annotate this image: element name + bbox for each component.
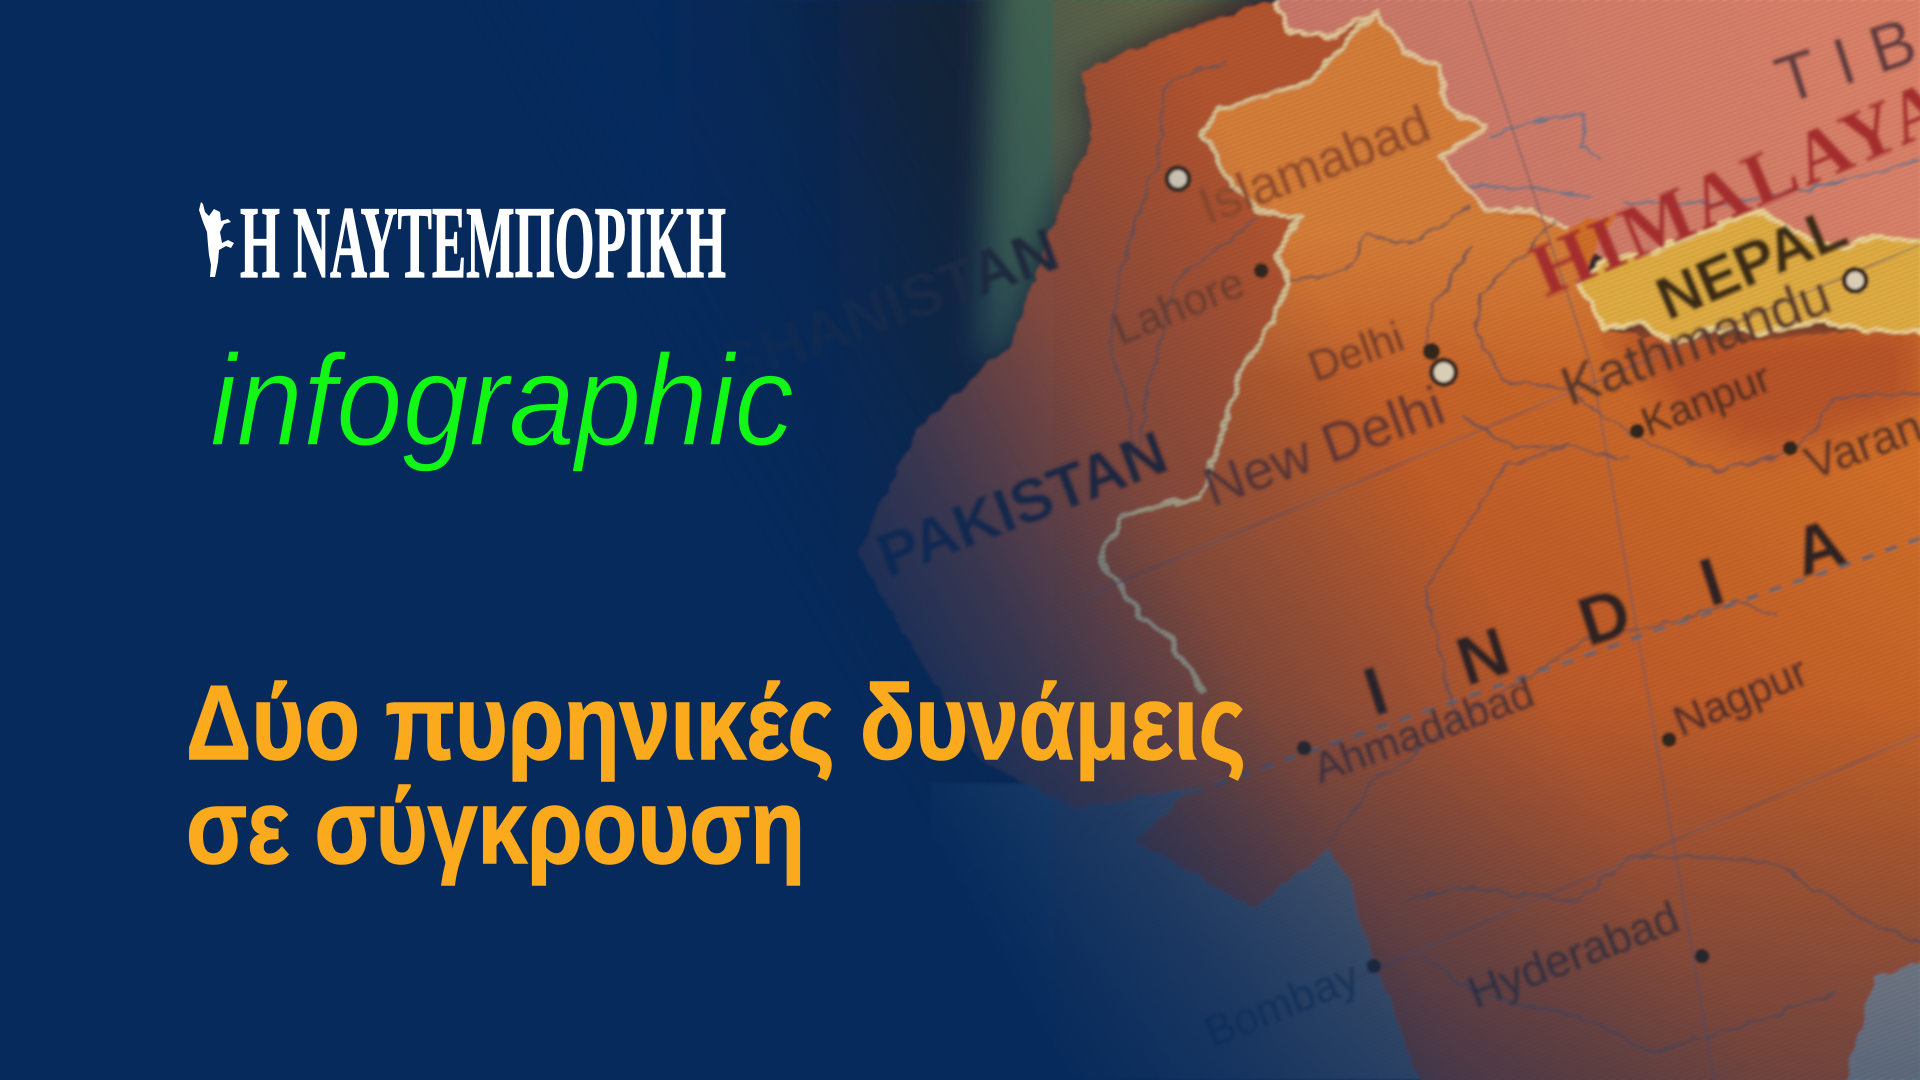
bottom darkening overlay <box>0 700 1920 1080</box>
map labels: Lahore <box>1106 258 1251 355</box>
tropic dashed line <box>1078 539 1920 833</box>
Pakistan India border <box>1100 13 1375 692</box>
Bay of Bengal <box>1843 955 1920 1080</box>
map base dark land <box>661 0 1920 1080</box>
map labels: Bombay <box>1198 951 1366 1057</box>
infographic cover: Η ΝΑΥΤΕΜΠΟΡΙΚΗ <box>240 186 726 300</box>
map labels: NEPAL <box>1647 193 1856 333</box>
headline: σε σύγκρουση <box>186 768 805 886</box>
map labels: INDIA <box>1355 479 1920 731</box>
map labels <box>706 0 1920 1057</box>
headline: Δύο πυρηνικές δυνάμεις <box>186 664 1246 782</box>
map labels: Nagpur <box>1666 647 1814 746</box>
Arabian sea <box>931 784 1920 1080</box>
blue rivers in Tibet <box>1469 116 1920 202</box>
logo: Hermes figure and masthead <box>199 186 726 300</box>
headline <box>186 664 1246 886</box>
Tibet border <box>1276 0 1569 228</box>
jagged land regions <box>857 0 1920 1080</box>
map labels: Delhi <box>1302 313 1410 391</box>
map labels: PAKISTAN <box>868 418 1176 590</box>
weave texture <box>1053 0 1920 1080</box>
map labels: Kanpur <box>1635 354 1777 446</box>
map labels: New Delhi <box>1195 374 1452 518</box>
map labels: Hyderabad <box>1461 891 1686 1018</box>
city markers <box>1254 263 1798 973</box>
map labels: Ahmadabad <box>1307 669 1541 793</box>
graticule lines <box>1078 0 1920 1080</box>
capital markers <box>1167 168 1866 384</box>
map labels: Kathmandu <box>1553 263 1839 418</box>
Uttar Pradesh darker band <box>1604 321 1920 456</box>
icon: Hermes figure <box>199 202 234 277</box>
Pakistan <box>857 0 1375 808</box>
India <box>1100 13 1920 1080</box>
Tibet <box>1276 0 1920 276</box>
map labels: GHANISTAN <box>706 215 1067 402</box>
Kashmir orange <box>1202 13 1616 404</box>
map labels: Islamabad <box>1191 94 1438 237</box>
label: infographic: infographic <box>210 327 794 473</box>
Afghanistan <box>980 0 1298 367</box>
Nepal <box>1578 211 1920 343</box>
rivers <box>1108 61 1920 1053</box>
